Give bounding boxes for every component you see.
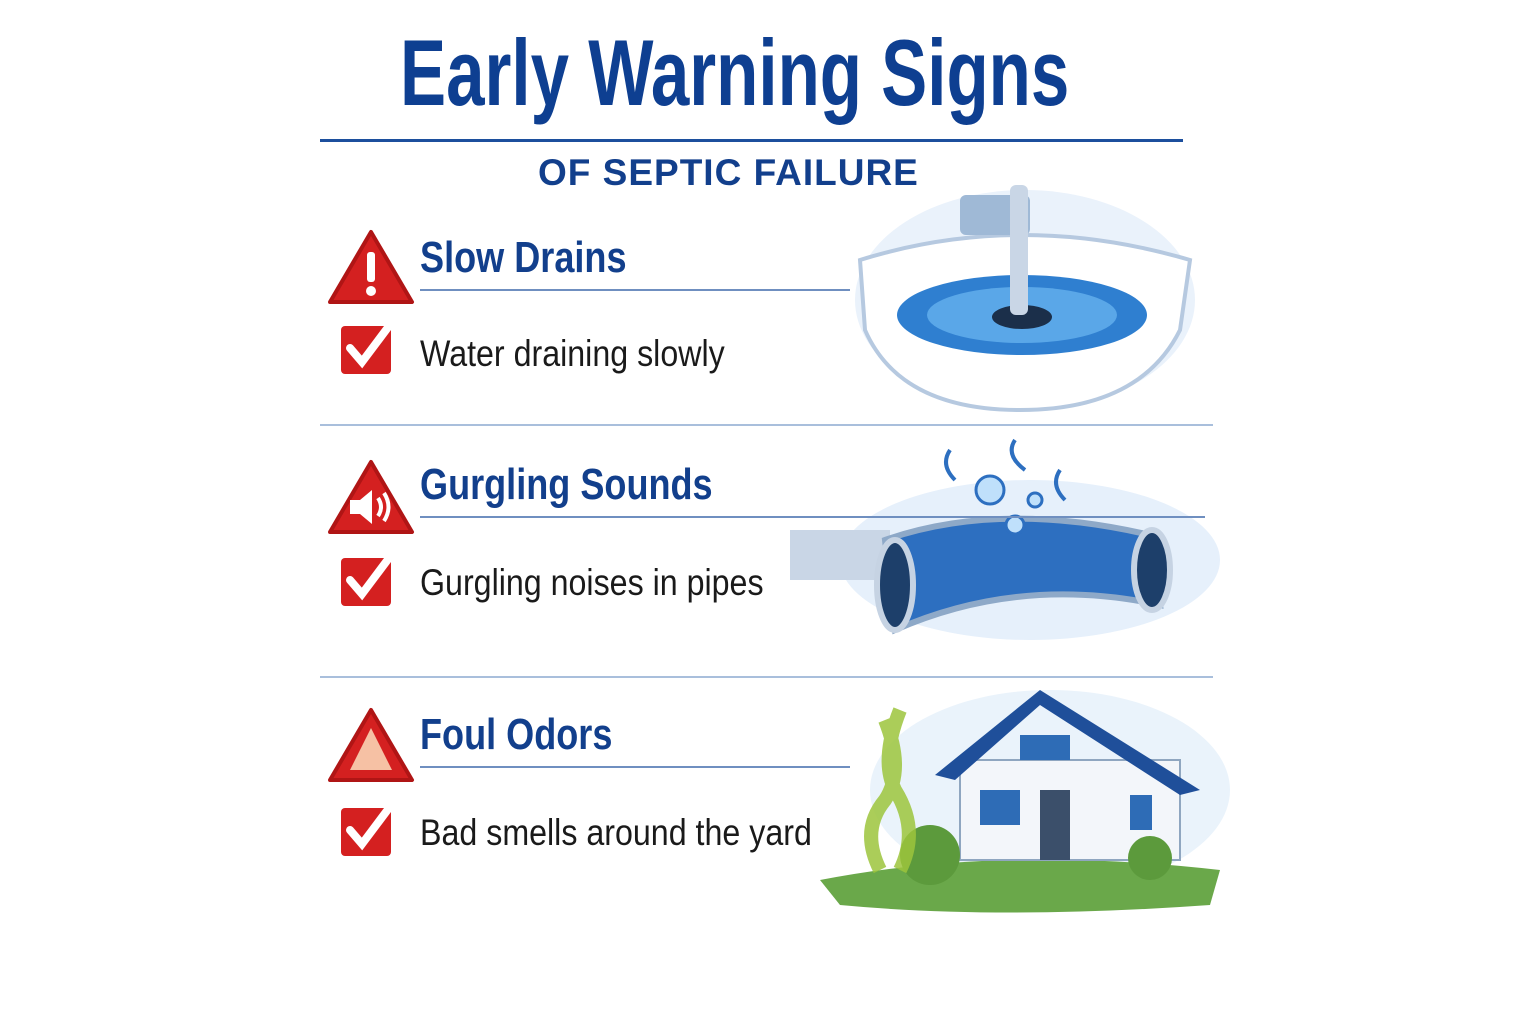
subtitle: OF SEPTIC FAILURE xyxy=(538,152,919,193)
icon: warning plain xyxy=(328,708,414,782)
heading: slow drains: Slow Drains xyxy=(420,233,627,282)
panel: foul odors xyxy=(328,690,1230,912)
icon: warning exclamation xyxy=(328,230,414,304)
illustration: pipe xyxy=(790,438,1220,640)
heading: gurgling sounds: Gurgling Sounds xyxy=(420,460,713,509)
text: bad smells: Bad smells around the yard xyxy=(420,812,812,853)
illustration: sink xyxy=(855,185,1195,412)
rule: foul odors xyxy=(420,766,850,768)
rule: gurgling xyxy=(420,516,1205,518)
text: gurgling noises: Gurgling noises in pipes xyxy=(420,562,764,603)
title: Early Warning Signs xyxy=(400,20,1069,125)
icon: warning speaker xyxy=(328,460,414,534)
text: water draining slowly: Water draining slowly xyxy=(420,333,725,374)
icon: checkbox xyxy=(341,326,391,374)
illustration: house xyxy=(820,690,1230,912)
title rule xyxy=(320,139,1183,142)
heading: foul odors: Foul Odors xyxy=(420,710,612,759)
icon: checkbox xyxy=(341,558,391,606)
panel: slow drains xyxy=(328,185,1195,412)
panel: gurgling sounds xyxy=(328,438,1220,640)
rule: slow drains xyxy=(420,289,850,291)
icon: checkbox xyxy=(341,808,391,856)
